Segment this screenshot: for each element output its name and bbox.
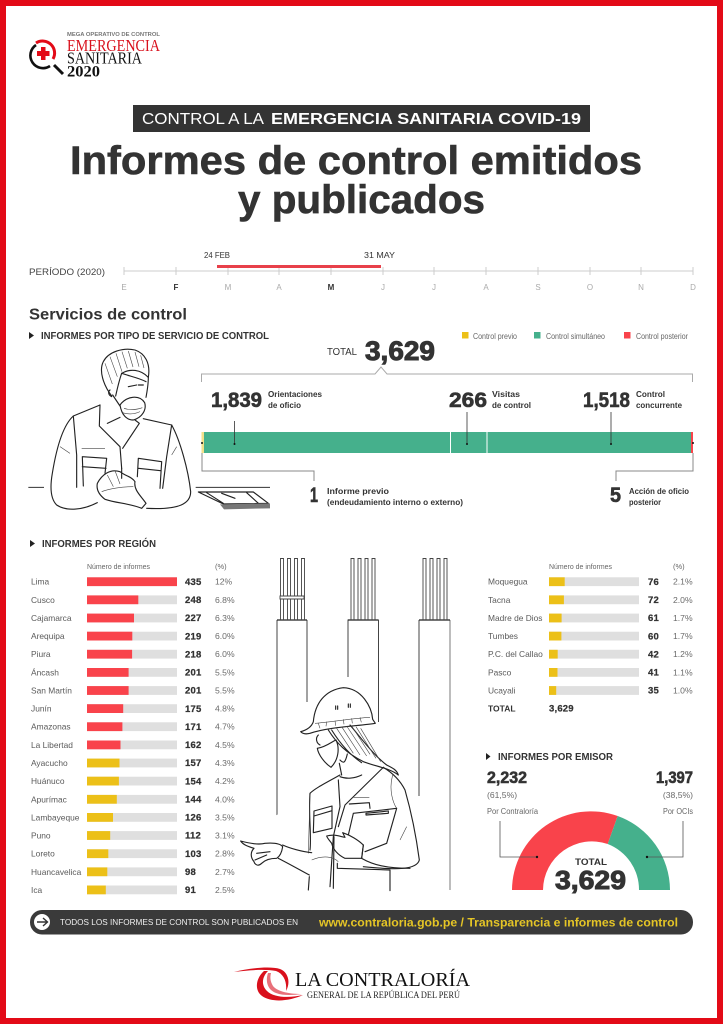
row: Cusco: 6.8% — [215, 595, 235, 605]
row: Cajamarca — [31, 613, 235, 624]
logo: La Contraloria: LA CONTRALORÍA — [295, 968, 471, 991]
illustration: columns — [277, 558, 450, 890]
stat: 5 accion de oficio posterior: 5 — [610, 484, 621, 507]
row: Junin: 4.8% — [215, 704, 235, 714]
total — [327, 336, 435, 366]
subheading: informes por region: INFORMES POR REGIÓN — [42, 537, 156, 550]
stat: 1,839 orientaciones de oficio: 1,839 — [211, 389, 262, 412]
row: San Martin: San Martín — [31, 686, 72, 696]
region table left: Número de informes — [87, 562, 150, 571]
timeline: periodo 2020: D — [690, 283, 696, 292]
row: Piura: 6.0% — [215, 649, 235, 659]
row: Cajamarca: 6.3% — [215, 613, 235, 623]
timeline: periodo 2020: J — [432, 283, 436, 292]
row: Tumbes: 1.7% — [673, 631, 693, 641]
row: Apurimac: 144 — [185, 794, 202, 806]
row: Madre de Dios — [488, 613, 693, 624]
row: Lima: Lima — [31, 577, 49, 587]
icon: magnifier with cross — [30, 41, 63, 74]
stat: 5 accion de oficio posterior: posterior — [629, 498, 661, 507]
logo: La Contraloria — [234, 968, 471, 1001]
row: Cusco — [31, 595, 235, 606]
row: Ucayali: 35 — [648, 686, 659, 697]
row: Ucayali — [488, 686, 693, 697]
row: Tacna — [488, 595, 693, 606]
row: P.C. del Callao: P.C. del Callao — [488, 649, 543, 659]
row: Ayacucho — [31, 758, 235, 769]
row: Tumbes: 60 — [648, 631, 659, 642]
row: P.C. del Callao — [488, 649, 693, 660]
subheading: informes por emisor: INFORMES POR EMISOR — [498, 752, 614, 763]
logo: Emergencia Sanitaria 2020: 2020 — [67, 64, 100, 80]
row: Junin: 175 — [185, 704, 202, 715]
stat: 266 visitas de control: 266 — [449, 389, 487, 412]
row: total: TOTAL — [488, 704, 516, 714]
row: Arequipa: 6.0% — [215, 631, 235, 641]
connector lines below bar — [202, 453, 693, 481]
timeline: periodo 2020: J — [381, 283, 385, 292]
row: Moquegua: 76 — [648, 577, 659, 588]
stat: por Contraloria: (61,5%) — [487, 790, 517, 800]
row: total — [488, 704, 574, 714]
row: Ica: Ica — [31, 885, 43, 895]
row: Cajamarca: 227 — [185, 613, 201, 624]
semicircle gauge: por emisor: TOTAL — [575, 857, 607, 868]
region table right: (%) — [673, 562, 685, 571]
stat: 1,518 control concurrente — [583, 389, 683, 412]
region table right — [488, 562, 693, 714]
timeline: periodo 2020: A — [276, 283, 282, 292]
row: Ancash — [31, 667, 235, 679]
row: Huanuco: 154 — [185, 776, 202, 787]
footer banner: www.contraloria.gob.pe / Transparencia e informes de control — [318, 916, 678, 930]
stat: 1,839 orientaciones de oficio — [211, 389, 323, 412]
legend: Control previo — [473, 332, 517, 341]
icon: arrow — [34, 914, 50, 930]
row: Ayacucho: Ayacucho — [31, 758, 68, 768]
logo: Emergencia Sanitaria 2020: SANITARIA — [67, 48, 143, 68]
row: Lima: 12% — [215, 577, 233, 587]
semicircle gauge: por emisor: 3,629 — [555, 865, 626, 895]
row: Amazonas: 171 — [185, 722, 202, 733]
row: Ica — [31, 885, 235, 896]
row: Loreto: 2.8% — [215, 849, 235, 859]
row: Piura — [31, 649, 235, 660]
row: Apurimac: Apurímac — [31, 794, 67, 804]
logo: Emergencia Sanitaria 2020: EMERGENCIA — [67, 36, 161, 55]
stat: 266 visitas de control — [449, 389, 531, 412]
stat: 1,518 control concurrente: concurrente — [636, 401, 683, 410]
stat: 5 accion de oficio posterior: Acción de oficio — [629, 487, 689, 496]
row: Ancash: 201 — [185, 668, 202, 679]
illustration: man with mask at desk — [28, 349, 270, 509]
timeline: periodo 2020: PERÍODO (2020) — [29, 267, 105, 278]
timeline: periodo 2020: N — [638, 283, 644, 292]
region table left — [31, 562, 235, 896]
kicker banner: EMERGENCIA SANITARIA COVID-19 — [271, 111, 581, 128]
row: Lima — [31, 577, 233, 588]
timeline: periodo 2020: A — [483, 283, 489, 292]
row: Loreto — [31, 849, 235, 860]
stat: por OCIs — [656, 768, 693, 816]
legend: Control simultáneo — [546, 332, 605, 341]
legend — [462, 332, 688, 341]
row: P.C. del Callao: 1.2% — [673, 649, 693, 659]
illustration: woman with helmet and clipboard — [240, 687, 420, 893]
row: Pasco — [488, 667, 693, 679]
region table right: Número de informes — [549, 562, 612, 571]
stat: 1,839 orientaciones de oficio: de oficio — [268, 401, 301, 410]
stat: por OCIs: Por OCIs — [663, 807, 693, 816]
stat: 1 informe previo: 1 — [310, 484, 318, 507]
row: Puno: 112 — [185, 831, 201, 842]
row: Huanuco: 4.2% — [215, 776, 235, 786]
row: Madre de Dios: Madre de Dios — [488, 613, 542, 623]
bracket — [202, 367, 692, 382]
row: Ica: 91 — [185, 885, 196, 896]
row: Tumbes: Tumbes — [488, 631, 518, 641]
stat: 266 visitas de control: Visitas — [492, 390, 521, 399]
row: Puno — [31, 830, 235, 842]
timeline: periodo 2020: E — [121, 283, 127, 292]
stat: 1 informe previo: Informe previo — [327, 487, 389, 496]
row: Amazonas: Amazonas — [31, 722, 71, 732]
row: Pasco: 41 — [648, 668, 659, 679]
row: total: 3,629 — [549, 704, 574, 714]
row: Huancavelica: 98 — [185, 867, 196, 878]
stat: 1,839 orientaciones de oficio: Orientaciones — [268, 390, 323, 399]
row: Arequipa — [31, 631, 235, 642]
row: Puno: Puno — [31, 830, 51, 840]
row: Piura: Piura — [31, 649, 51, 659]
row: Tacna: 2.0% — [673, 595, 693, 605]
row: Huanuco: Huánuco — [31, 776, 65, 786]
heading: Servicios de control: Servicios de control — [29, 306, 187, 324]
row: Loreto: Loreto — [31, 849, 55, 859]
row: Ayacucho: 157 — [185, 758, 201, 769]
row: Cusco: 248 — [185, 595, 201, 606]
row: Ancash: 5.5% — [215, 667, 235, 677]
footer banner: TODOS LOS INFORMES DE CONTROL SON PUBLICADOS EN — [60, 918, 298, 927]
stat: 1,518 control concurrente: 1,518 — [583, 389, 630, 412]
row: Apurimac: 4.0% — [215, 794, 235, 804]
timeline: periodo 2020: 24 FEB — [204, 250, 230, 260]
legend: Control posterior — [636, 332, 688, 341]
stat: 1,518 control concurrente: Control — [636, 390, 665, 399]
row: Arequipa: 219 — [185, 631, 201, 642]
stat: por OCIs: 1,397 — [656, 768, 693, 787]
title — [70, 139, 642, 222]
row: P.C. del Callao: 42 — [648, 649, 659, 660]
row: Moquegua — [488, 577, 693, 588]
row: Tumbes — [488, 631, 693, 642]
row: Tacna: Tacna — [488, 595, 511, 605]
row: La Libertad — [31, 740, 235, 751]
row: Huanuco — [31, 776, 235, 787]
row: Moquegua: Moquegua — [488, 577, 528, 587]
logo: Emergencia Sanitaria 2020: MEGA OPERATIVO DE CONTROL — [67, 32, 161, 38]
row: Cajamarca: Cajamarca — [31, 613, 72, 623]
row: Ucayali: Ucayali — [488, 686, 516, 696]
row: Cusco: Cusco — [31, 595, 55, 605]
row: Amazonas — [31, 722, 235, 733]
row: La Libertad: 4.5% — [215, 740, 235, 750]
row: Tacna: 72 — [648, 595, 659, 606]
stat: por Contraloria — [487, 768, 539, 816]
stat: por Contraloria: Por Contraloría — [487, 807, 539, 816]
region table left: (%) — [215, 562, 227, 571]
row: Huancavelica — [31, 867, 235, 878]
row: La Libertad: 162 — [185, 740, 201, 751]
stat: 5 accion de oficio posterior — [610, 484, 689, 507]
row: Ica: 2.5% — [215, 885, 235, 895]
row: Ancash: Áncash — [31, 667, 59, 677]
stat: 266 visitas de control: de control — [492, 401, 531, 410]
row: Moquegua: 2.1% — [673, 577, 693, 587]
kicker banner — [133, 105, 590, 132]
title: Informes de control emitidos — [70, 139, 642, 183]
timeline: periodo 2020: 31 MAY — [364, 250, 395, 260]
row: San Martin — [31, 686, 235, 697]
row: Ucayali: 1.0% — [673, 686, 693, 696]
row: Puno: 3.1% — [215, 830, 235, 840]
kicker banner: CONTROL A LA — [142, 111, 265, 128]
row: Lambayeque: 3.5% — [215, 812, 235, 822]
timeline: periodo 2020 — [29, 250, 696, 292]
total: 3,629 — [365, 336, 435, 366]
row: San Martin: 5.5% — [215, 686, 235, 696]
row: Junin — [31, 704, 235, 715]
stat: 1 informe previo — [310, 484, 463, 507]
row: La Libertad: La Libertad — [31, 740, 73, 750]
timeline: periodo 2020: M — [225, 283, 232, 292]
logo: La Contraloria: GENERAL DE LA REPÚBLICA DEL PERÚ — [307, 989, 460, 1001]
stat: por OCIs: (38,5%) — [663, 790, 693, 800]
stat: 1 informe previo: (endeudamiento interno o externo) — [327, 498, 463, 507]
row: Madre de Dios: 1.7% — [673, 613, 693, 623]
row: Lambayeque — [31, 812, 235, 824]
timeline: periodo 2020: M — [328, 283, 335, 292]
row: Madre de Dios: 61 — [648, 613, 659, 624]
stacked bar: tipo de servicio — [201, 412, 694, 453]
logo: Emergencia Sanitaria 2020 — [30, 32, 161, 80]
row: Lambayeque: Lambayeque — [31, 812, 80, 822]
stat: por Contraloria: 2,232 — [487, 768, 527, 787]
row: San Martin: 201 — [185, 686, 202, 697]
row: Amazonas: 4.7% — [215, 722, 235, 732]
row: Huancavelica: Huancavelica — [31, 867, 82, 877]
footer banner — [30, 910, 693, 934]
subheading: informes por tipo de servicio: INFORMES POR TIPO DE SERVICIO DE CONTROL — [41, 331, 269, 342]
row: Huancavelica: 2.7% — [215, 867, 235, 877]
semicircle gauge: por emisor — [500, 811, 683, 895]
row: Pasco: Pasco — [488, 667, 512, 677]
total: TOTAL — [327, 347, 357, 358]
row: Apurimac — [31, 794, 235, 806]
row: Pasco: 1.1% — [673, 667, 693, 677]
row: Junin: Junín — [31, 704, 52, 714]
icon: swoosh — [234, 968, 303, 1000]
highlighted period bar — [217, 265, 381, 268]
timeline: periodo 2020: O — [587, 283, 593, 292]
row: Piura: 218 — [185, 649, 201, 660]
row: Ayacucho: 4.3% — [215, 758, 235, 768]
row: Loreto: 103 — [185, 849, 201, 860]
title: y publicados — [238, 178, 485, 222]
timeline: periodo 2020: F — [174, 283, 179, 292]
row: Lambayeque: 126 — [185, 813, 201, 824]
row: Arequipa: Arequipa — [31, 631, 65, 641]
timeline: periodo 2020: S — [535, 283, 541, 292]
row: Lima: 435 — [185, 577, 202, 588]
